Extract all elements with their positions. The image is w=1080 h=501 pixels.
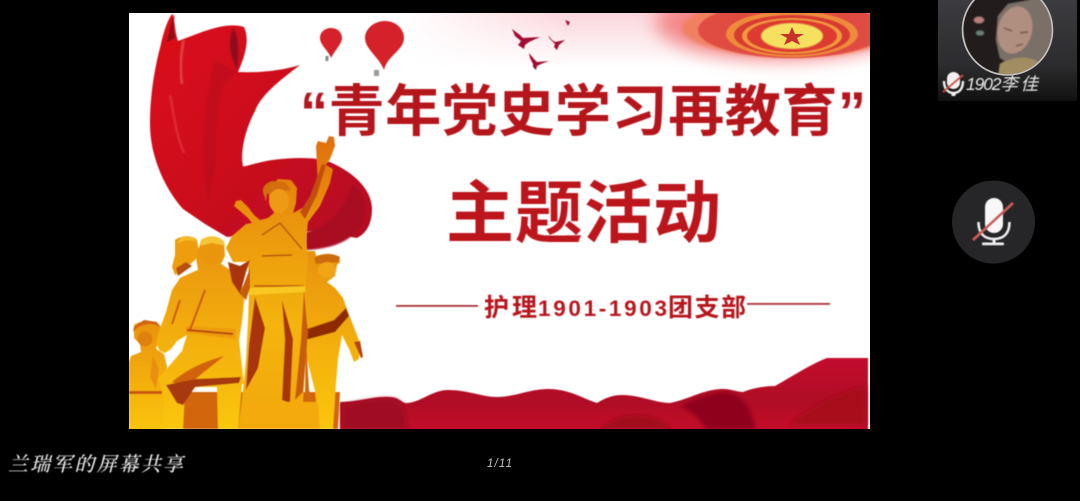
button: muted microphone <box>952 180 1035 264</box>
panel: participant tile <box>938 0 1077 101</box>
uniform details <box>254 223 304 286</box>
figure: right man with scarf <box>297 251 363 429</box>
red flag <box>150 14 372 250</box>
title: 青年党史学习再教育: “青年党史学习再教育” <box>300 80 866 143</box>
pink top wash <box>434 13 690 58</box>
panel: presentation slide <box>129 0 905 436</box>
page counter: 1/11 <box>487 458 512 470</box>
caption: screen-share owner: 兰瑞军的屏幕共享 <box>8 454 186 476</box>
avatar portrait <box>962 0 1054 76</box>
subtitle with rules: 1901-1903 <box>538 296 667 321</box>
icon: flying doves <box>512 20 570 70</box>
participant name: 1902李 佳 <box>966 74 1040 94</box>
slide background <box>129 13 870 429</box>
button circle <box>952 180 1035 264</box>
figure: woman in skirt <box>156 236 245 429</box>
emblem: sun with star <box>646 13 870 73</box>
subtitle with rules: 护理 <box>484 294 537 322</box>
icon: muted microphone small <box>943 72 963 96</box>
icon: red balloons <box>320 21 404 76</box>
shadows on legs and arm <box>228 260 293 403</box>
figure: woman behind <box>172 236 199 276</box>
tile background <box>938 0 1077 101</box>
monument base shadow <box>160 392 340 429</box>
subtitle with rules: 团支部 <box>668 294 746 322</box>
figures: golden monument <box>129 136 363 436</box>
heading: 主题活动: 主题活动 <box>446 176 721 252</box>
subtitle with rules <box>396 294 830 322</box>
red waves at bottom <box>340 358 868 430</box>
figure: child at left <box>129 320 167 436</box>
figure: central soldier raising arm <box>226 136 335 429</box>
icon: microphone slashed <box>973 198 1013 245</box>
